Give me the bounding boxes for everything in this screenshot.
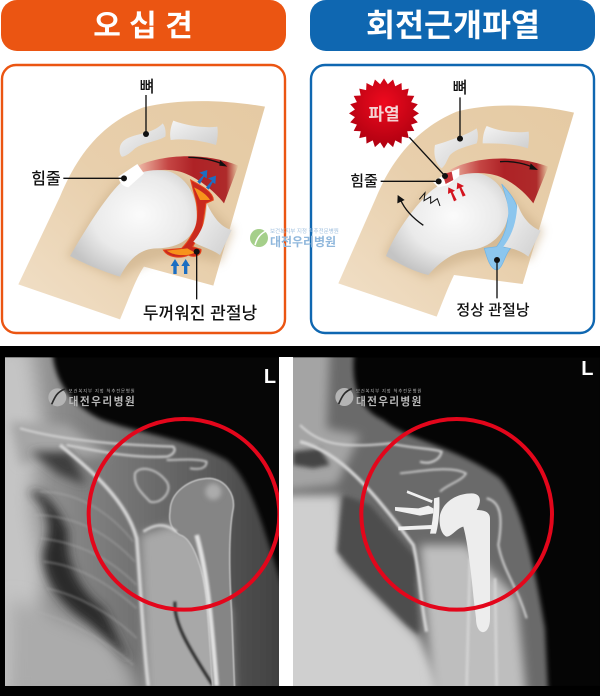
ribs — [33, 492, 137, 665]
bone: acromion — [434, 126, 529, 168]
watermark: hospital logo — [48, 388, 135, 408]
arrow: muscle direction — [188, 157, 225, 165]
implant: screws and baseplate — [395, 490, 439, 534]
soft shadow under bones — [383, 177, 543, 278]
watermark: hospital logo: 보건복지부 지정 척추전문병원 — [69, 388, 135, 395]
icon: tear burst — [349, 78, 419, 148]
watermark: hospital logo: 대전우리병원 — [356, 395, 421, 408]
label: tendon: 힘줄 — [350, 173, 378, 190]
title: rotator cuff tear header: 회전근개파열 — [366, 7, 540, 43]
label: tendon: 힘줄 — [31, 170, 61, 188]
red highlight circle — [89, 419, 279, 610]
arrows: red tear direction — [448, 183, 466, 201]
watermark: hospital logo — [335, 387, 421, 408]
arm tissue — [140, 525, 233, 696]
bone: glenoid — [193, 203, 232, 255]
soft shadow under bones — [67, 171, 233, 280]
label: left marker L: L — [264, 366, 276, 388]
tendon with tear — [433, 168, 459, 187]
panel: rotator cuff tear diagram — [311, 65, 594, 333]
shoulder tissue background — [18, 101, 265, 319]
label: bone: 뼈 — [453, 79, 467, 97]
arrows: blue pressure — [171, 170, 216, 274]
clavicle and scapula bones — [300, 425, 527, 686]
arrow: muscle direction — [500, 161, 535, 168]
body silhouette — [5, 357, 279, 686]
shoulder tissue background — [338, 106, 574, 317]
background: black x-ray band — [0, 346, 600, 696]
pointer lines — [381, 97, 500, 298]
watermark: center hospital logo: 대전우리병원 — [270, 235, 336, 249]
divider: white strip between x-rays — [279, 357, 293, 686]
label: tear: 파열 — [368, 105, 400, 124]
watermark: center hospital logo: 보건복지부 지정 척추전문병원 — [270, 227, 339, 235]
bone: glenoid — [503, 203, 541, 257]
lung shadow — [337, 495, 419, 635]
watermark: center hospital logo — [250, 227, 339, 249]
zigzag crack — [419, 193, 440, 206]
x-ray: before, frozen shoulder — [5, 357, 279, 686]
label: right marker L: L — [581, 358, 593, 380]
muscle: rotator cuff — [138, 156, 238, 203]
title: frozen shoulder header: 오 십 견 — [93, 10, 193, 43]
label: normal capsule: 정상 관절낭 — [456, 302, 530, 319]
bone: humerus — [70, 170, 197, 277]
arrow: curved movement — [401, 200, 423, 225]
panel: frozen shoulder diagram — [2, 65, 285, 333]
implant: humeral stem — [440, 493, 490, 632]
body silhouette — [280, 345, 548, 696]
capsule: thickened joint capsule — [163, 180, 213, 257]
title: rotator cuff tear header — [310, 0, 595, 51]
tendon — [118, 164, 144, 187]
clavicle and scapula bones — [20, 428, 207, 686]
bone: acromion — [120, 121, 218, 157]
watermark: hospital logo: 보건복지부 지정 척추전문병원 — [356, 387, 421, 394]
lung shadow — [28, 491, 132, 663]
watermark: hospital logo: 대전우리병원 — [69, 395, 135, 408]
title: frozen shoulder header — [1, 0, 286, 51]
label: thickened capsule: 두꺼워진 관절낭 — [143, 304, 257, 323]
pointer lines — [63, 95, 200, 299]
bone: humerus — [386, 173, 508, 275]
red highlight circle — [361, 419, 552, 610]
muscle: rotator cuff — [450, 158, 548, 203]
label: bone: 뼈 — [140, 78, 154, 96]
x-ray: after, shoulder replacement — [293, 357, 593, 686]
capsule: normal joint capsule — [484, 184, 518, 270]
humeral head — [170, 478, 235, 696]
